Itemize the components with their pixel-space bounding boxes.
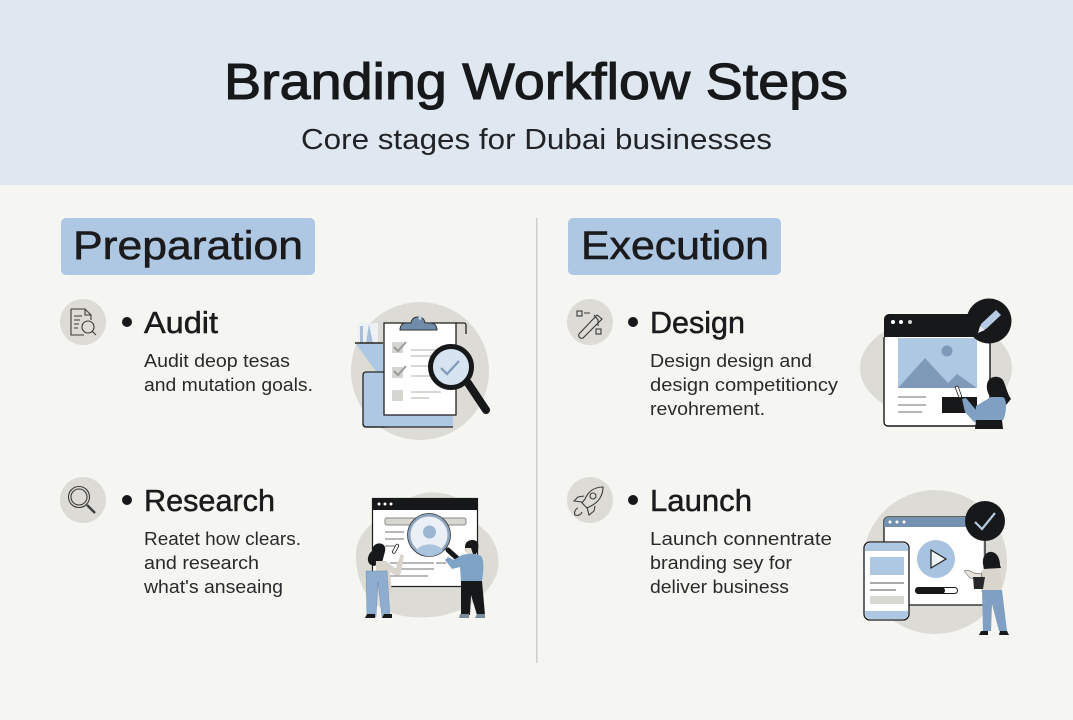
panel: preparation [60, 218, 498, 618]
heading: execution: Execution [581, 224, 769, 268]
description: launch: Launch connentrate [650, 529, 832, 549]
bullet [628, 495, 638, 505]
title: Branding Workflow Steps [224, 53, 848, 110]
description: audit: Audit deop tesas [144, 351, 290, 371]
bullet [122, 495, 132, 505]
panel: execution [567, 218, 1012, 635]
illustration: clipboard with magnifier [351, 302, 489, 440]
description: launch: branding sey for [650, 553, 792, 573]
icon: magic wand and nodes [567, 299, 613, 345]
step: research [60, 477, 498, 618]
icon: rocket [567, 477, 613, 523]
description: research: Reatet how clears. [144, 529, 301, 549]
subtitle: Core stages for Dubai businesses [301, 124, 772, 156]
description: design: revohrement. [650, 399, 765, 419]
heading: audit: Audit [144, 305, 218, 340]
header band [0, 0, 1073, 185]
description: audit: and mutation goals. [144, 375, 313, 395]
icon: magnifier [60, 477, 106, 523]
description: research [143, 529, 301, 597]
icon: document search [60, 299, 106, 345]
heading: preparation: Preparation [73, 224, 303, 268]
heading: research: Research [144, 483, 275, 518]
description: launch [650, 529, 832, 597]
step: audit [60, 299, 489, 440]
heading: launch: Launch [650, 483, 752, 518]
description: design [650, 351, 838, 419]
illustration: two people inspecting a web page [356, 492, 498, 618]
description: research: and research [144, 553, 259, 573]
heading: execution [568, 218, 781, 275]
heading: design: Design [650, 305, 745, 340]
illustration: phone, video page and presenter [863, 490, 1009, 635]
bullet [628, 317, 638, 327]
step: launch [567, 477, 1009, 635]
heading: preparation [61, 218, 315, 275]
description: research: what's anseaing [143, 577, 283, 597]
description: design: Design design and [650, 351, 812, 371]
description: launch: deliver business [650, 577, 789, 597]
illustration: web page with designer [860, 298, 1012, 429]
description: audit [144, 351, 313, 395]
description: design: design competitioncy [650, 375, 838, 395]
step: design [567, 298, 1012, 429]
bullet [122, 317, 132, 327]
